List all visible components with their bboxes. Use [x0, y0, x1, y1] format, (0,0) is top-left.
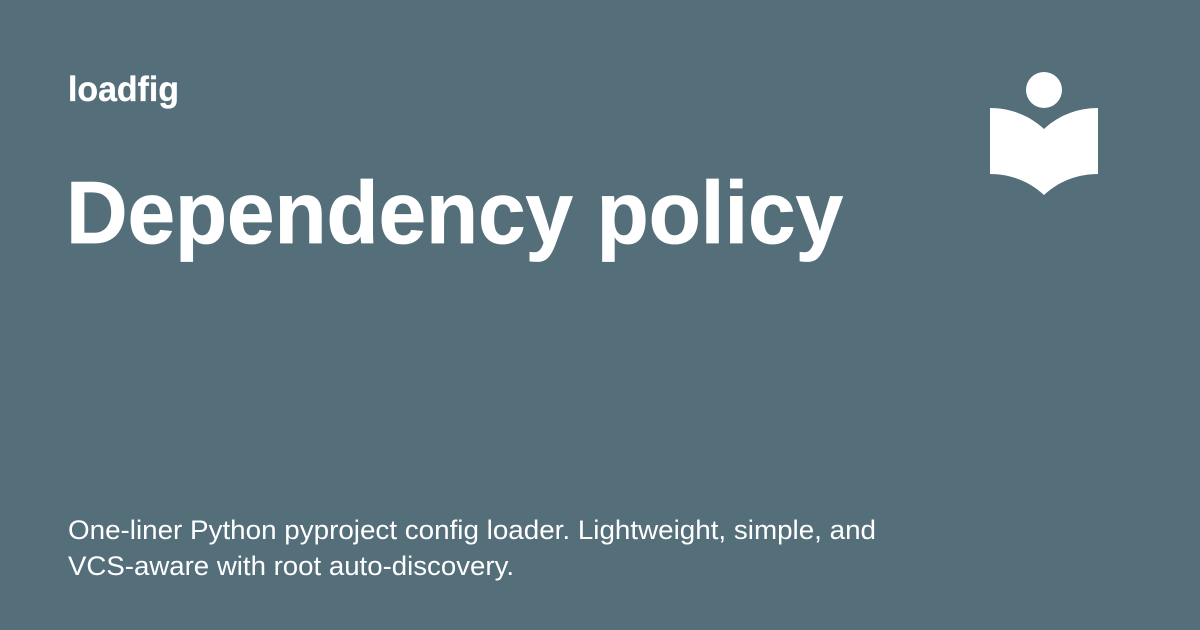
icon: reading person with book	[990, 72, 1098, 195]
site name: loadfig	[68, 70, 179, 109]
description text: VCS-aware with root auto-discovery.	[68, 551, 514, 581]
description text: One-liner Python pyproject config loader. Lightweight, simple, and	[68, 515, 876, 545]
title: Dependency policy	[66, 163, 843, 262]
description text	[68, 515, 876, 581]
